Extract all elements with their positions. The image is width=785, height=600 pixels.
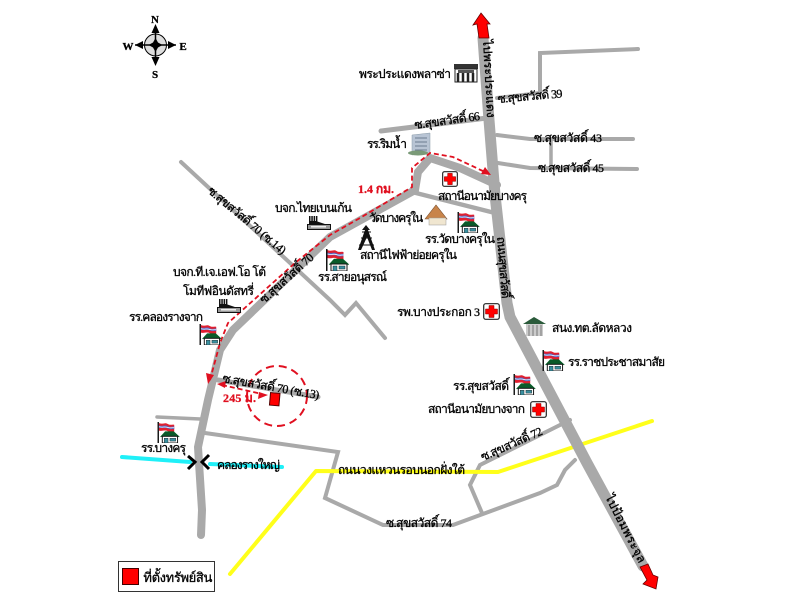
- red arrow south: [640, 564, 658, 589]
- icon: electricity tower: [358, 225, 375, 250]
- label: Soi 39: ซ.สุขสวัสดิ์ 39: [497, 84, 563, 107]
- property marker: [269, 393, 280, 406]
- icon: school Khlong Rang Chak: [200, 324, 221, 345]
- icon: health centre Bang Chak: [531, 402, 546, 417]
- icon: hospital Bang Prakok 3: [484, 304, 499, 319]
- icon: government office: [523, 317, 546, 336]
- legend: ที่ตั้งทรัพย์สิน: [143, 568, 212, 585]
- label: school Sai Anuson: รร.สายอนุสรณ์: [318, 270, 387, 285]
- property radius circle: [247, 366, 307, 426]
- label: health centre Bang Chak: สถานีอนามัยบางจาก: [428, 402, 525, 416]
- secondary road Soi Suk Sawat 70: [198, 158, 497, 535]
- label: hospital: รพ.บางประกอก 3: [397, 305, 480, 319]
- main road Suk Sawat: [483, 38, 643, 566]
- legend: [118, 562, 214, 592]
- label: distance 245 m: 245 ม.: [223, 391, 256, 405]
- icon: factory TJFO: [218, 299, 240, 312]
- label: Soi 43: ซ.สุขสวัสดิ์ 43: [534, 129, 602, 146]
- label: Soi 74: ซ.สุขสวัสดิ์ 74: [386, 514, 452, 531]
- label: Soi 45: ซ.สุขสวัสดิ์ 45: [538, 159, 604, 176]
- icon: factory Thai Benken: [308, 216, 330, 230]
- compass: S: [152, 69, 158, 81]
- label: TJFO company: บจก.ที.เจ.เอฟ.โอ โต้: [173, 265, 266, 279]
- compass: E: [179, 41, 187, 53]
- label: to Phra Pradaeng: ไปพระประแดง: [480, 38, 498, 118]
- label: to Phra Chunlachomklao Fort: ไปป้อมพระจุล: [601, 491, 649, 566]
- label: Wat Bang Khru Nai: วัดบางครุใน: [369, 211, 423, 226]
- label: Lat Luang office: สนง.ทต.ลัดหลวง: [552, 321, 632, 335]
- label: distance 1.4 km: 1.4 กม.: [358, 182, 394, 196]
- dashed 245 m distance: [217, 381, 268, 399]
- local roads network: [157, 49, 638, 525]
- label: substation: สถานีไฟฟ้าย่อยครุใน: [360, 248, 457, 263]
- outer ring road: [230, 421, 652, 574]
- label: ring road: ถนนวงแหวนรอบนอกฝั่งใต้: [338, 461, 465, 477]
- label: Rim Nam school: รร.ริมน้ำ: [367, 135, 407, 151]
- label: Thai Benken: บจก.ไทยเบนเก้น: [275, 201, 352, 215]
- label: Soi 72: ซ.สุขสวัสดิ์ 72: [478, 422, 545, 465]
- label: Soi 66: ซ.สุขสวัสดิ์ 66: [413, 107, 481, 133]
- label: health centre Bang Khru: สถานีอนามัยบางครุ: [438, 189, 528, 204]
- label: Soi 70 branch 14: ซ.สุขสวัสดิ์ 70 (ซ.14): [204, 182, 290, 258]
- icon: school Wat Bang Khru Nai: [458, 212, 479, 233]
- label: Khlong Rang Yai: คลองรางใหญ่: [217, 458, 280, 472]
- canal: Khlong Rang Yai: [122, 457, 282, 467]
- compass: W: [122, 41, 134, 53]
- label: Suk Sawat road: ถนนสุขสวัสดิ์: [493, 236, 515, 301]
- bridge symbol: [188, 455, 209, 469]
- compass: [122, 14, 187, 81]
- icon: shop plaza: [454, 64, 478, 82]
- label: school Wat Bang Khru Nai: รร.วัดบางครุใน: [425, 232, 495, 247]
- label: Ratchaprachasamasai school: รร.ราชประชาสมาสัย: [568, 355, 665, 369]
- icon: temple: [425, 205, 447, 225]
- icon: school Sai Anuson: [326, 249, 349, 271]
- icon: school Bang Khru: [158, 422, 179, 443]
- icon: school Suk Sawat: [514, 374, 535, 395]
- icon: school Ratchaprachasamasai: [543, 350, 564, 371]
- label: Motif Industry: โมทีฟอินดัสทรี่: [183, 282, 255, 298]
- red arrow north: [473, 13, 490, 38]
- label: school Khlong Rang Chak: รร.คลองรางจาก: [129, 310, 203, 324]
- dashed route 1.4 km: [206, 153, 491, 384]
- label: Phra Pradaeng Plaza: พระประแดงพลาซ่า: [359, 67, 451, 81]
- label: Soi 70 branch 13: ซ.สุขสวัสดิ์ 70 (ซ.13): [221, 369, 321, 403]
- icon: office building school: [408, 133, 430, 156]
- icon: health centre Bang Khru: [443, 172, 457, 186]
- compass: N: [151, 14, 159, 26]
- label: Soi 70: ซ.สุขสวัสดิ์ 70: [255, 249, 317, 307]
- label: Suk Sawat school: รร.สุขสวัสดิ์: [453, 377, 511, 394]
- label: school Bang Khru: รร.บางครุ: [141, 441, 187, 456]
